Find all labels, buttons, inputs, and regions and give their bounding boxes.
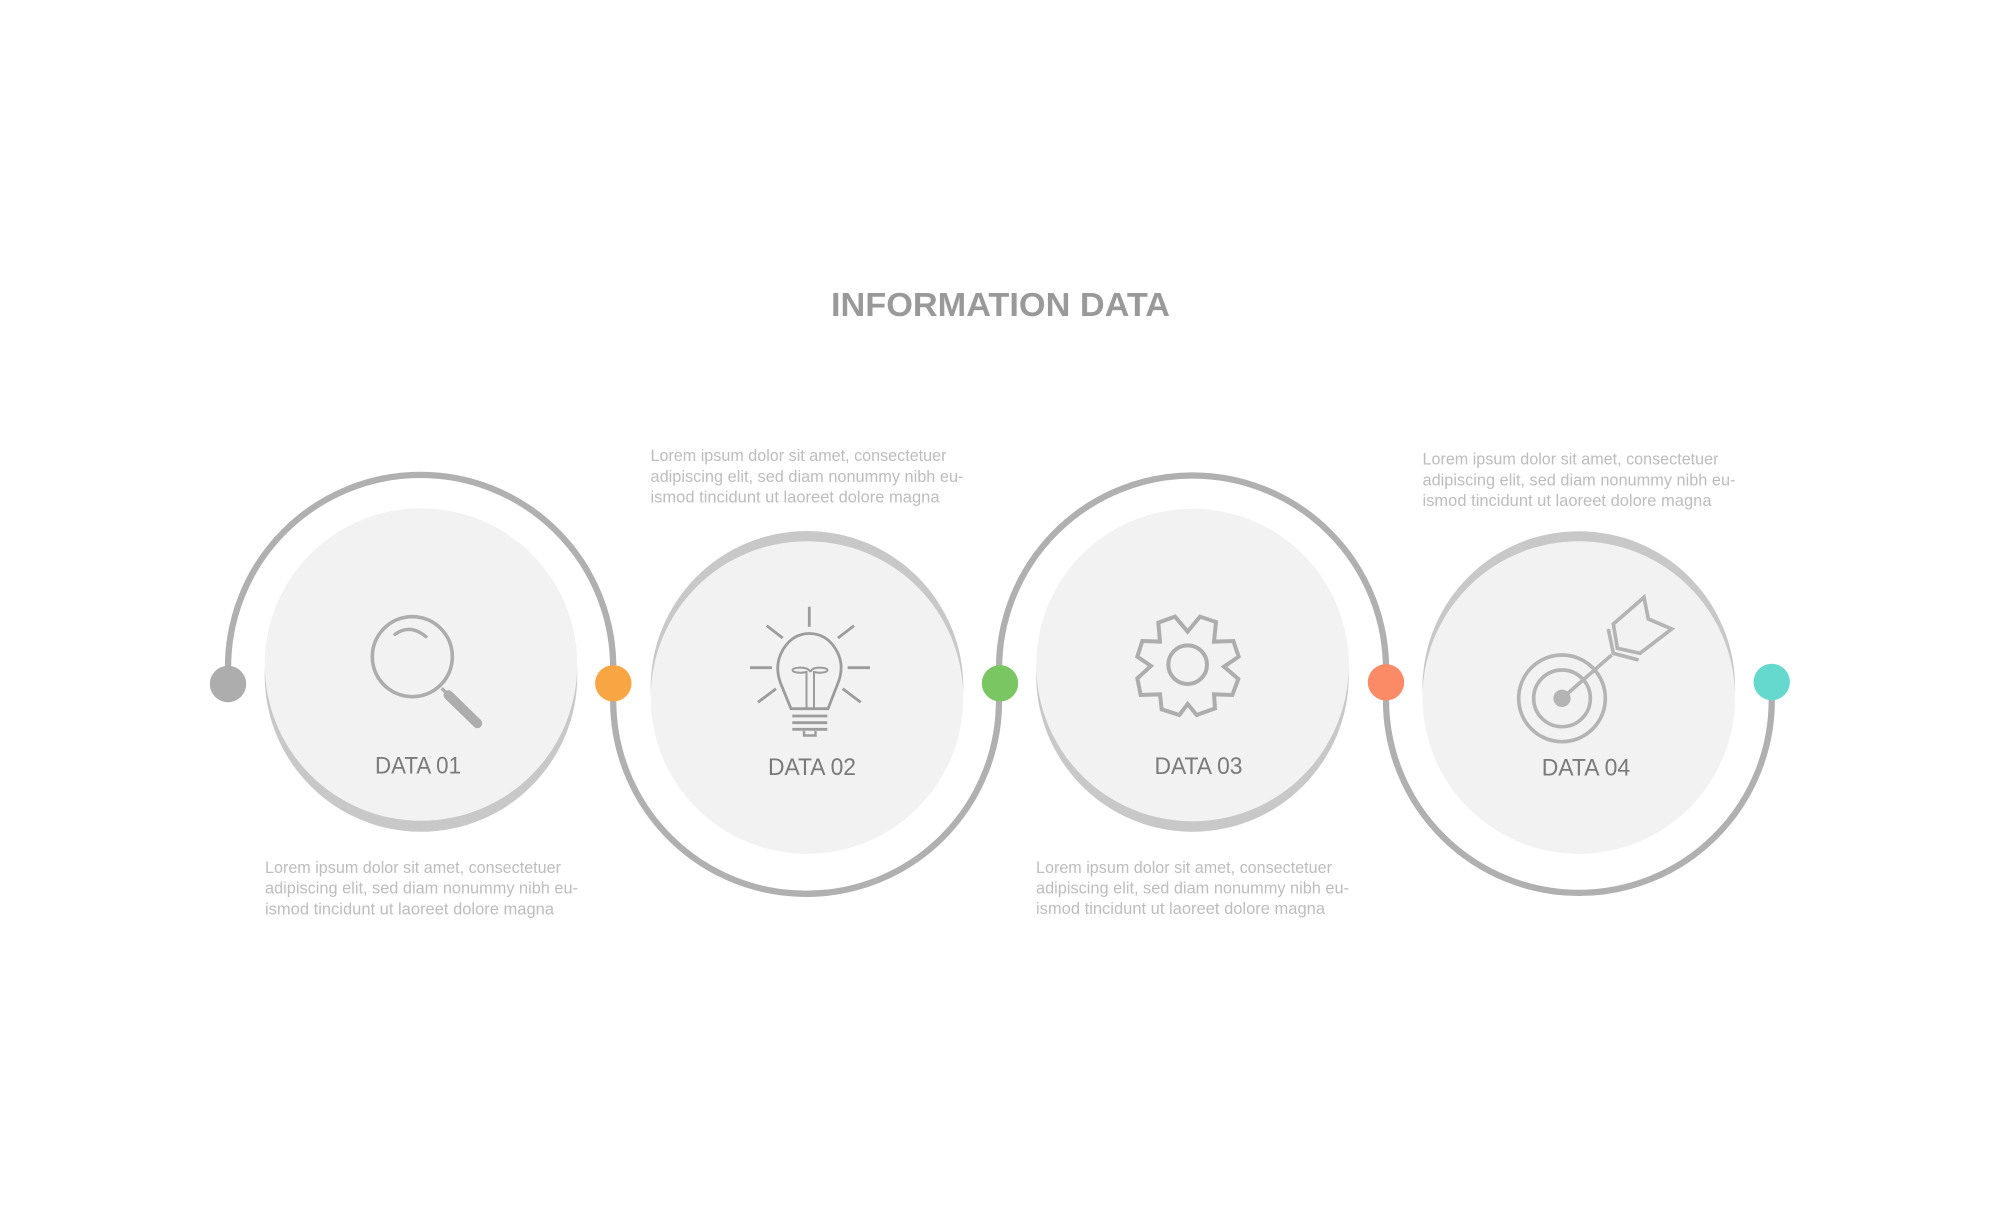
text block: data 03: ismod tincidunt ut laoreet dolore magna xyxy=(1036,900,1326,918)
node: teal xyxy=(1754,664,1790,700)
text block: data 03: Lorem ipsum dolor sit amet, consectetuer xyxy=(1036,859,1332,877)
node: coral xyxy=(1368,664,1404,700)
panel: data 04 xyxy=(1422,451,1736,854)
label: data 03: DATA 03 xyxy=(1154,753,1242,780)
label: data 01: DATA 01 xyxy=(375,752,461,780)
label: data 04: DATA 04 xyxy=(1542,755,1630,782)
text block: data 03 xyxy=(1036,859,1349,918)
text block: data 04: adipiscing elit, sed diam nonummy nibh eu- xyxy=(1422,471,1736,489)
node: start grey xyxy=(210,666,246,702)
text block: data 02: adipiscing elit, sed diam nonummy nibh eu- xyxy=(650,468,964,486)
panel: data 02 xyxy=(650,447,964,854)
title: INFORMATION DATA xyxy=(831,287,1170,324)
text block: data 01: adipiscing elit, sed diam nonummy nibh eu- xyxy=(265,880,578,898)
node: orange xyxy=(595,665,632,702)
text block: data 01: ismod tincidunt ut laoreet dolore magna xyxy=(265,900,555,918)
text block: data 02: ismod tincidunt ut laoreet dolore magna xyxy=(650,488,940,506)
text block: data 04: Lorem ipsum dolor sit amet, consectetuer xyxy=(1422,451,1719,469)
text block: data 01: Lorem ipsum dolor sit amet, consectetuer xyxy=(265,859,561,877)
label: data 02: DATA 02 xyxy=(768,754,856,781)
icon: gear xyxy=(1137,617,1239,715)
panel: data 01 xyxy=(265,508,578,918)
icon: magnifying glass xyxy=(372,617,477,723)
text block: data 04: ismod tincidunt ut laoreet dolore magna xyxy=(1422,492,1712,510)
panel: data 03 xyxy=(1036,509,1349,918)
text block: data 04 xyxy=(1422,451,1736,510)
disc: data 04 xyxy=(1422,531,1735,854)
text block: data 01 xyxy=(265,859,578,918)
disc: data 03 xyxy=(1036,509,1349,832)
disc: data 01 xyxy=(265,508,577,832)
text block: data 02 xyxy=(650,447,964,506)
icon: light bulb xyxy=(750,607,870,736)
text block: data 03: adipiscing elit, sed diam nonummy nibh eu- xyxy=(1036,880,1349,898)
icon: target with arrow xyxy=(1519,597,1672,742)
connecting wavy line xyxy=(228,475,1772,894)
text block: data 02: Lorem ipsum dolor sit amet, consectetuer xyxy=(650,447,947,465)
node: green xyxy=(982,665,1018,702)
disc: data 02 xyxy=(651,531,963,854)
